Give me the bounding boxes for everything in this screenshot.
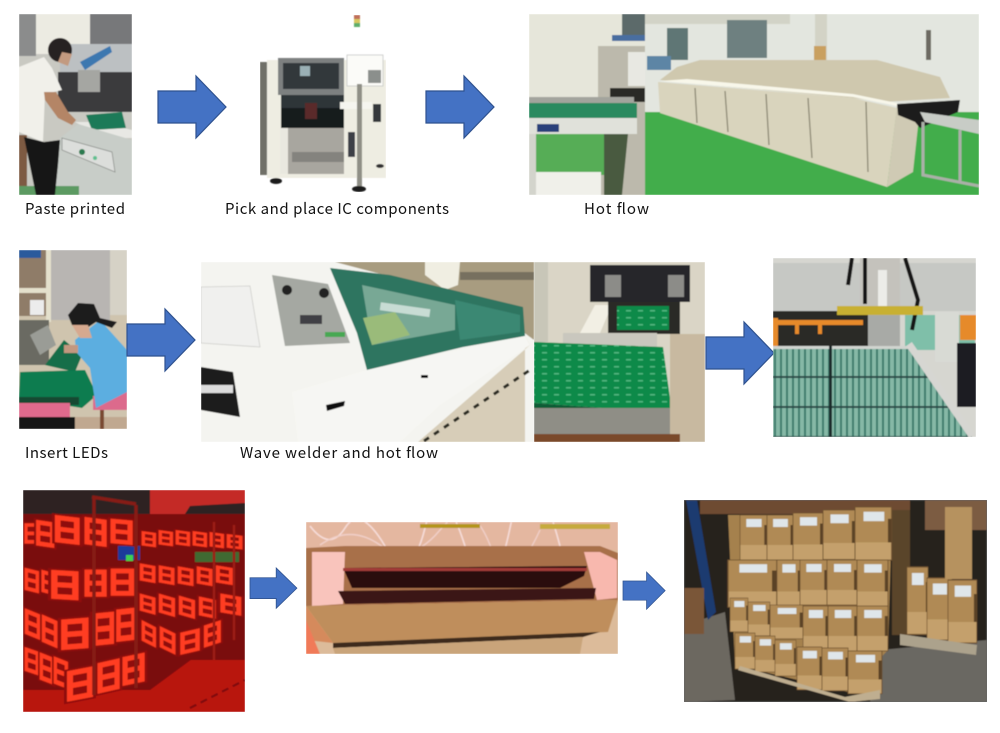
arrow 6 (623, 572, 665, 609)
arrow 5 (250, 568, 297, 608)
photo: red LED displays burn-in (23, 490, 245, 712)
photo: inserting LEDs (19, 250, 127, 429)
label: Hot flow: Hot flow (584, 198, 649, 219)
photo: wave welder (201, 262, 534, 442)
label: Paste printed: Paste printed (25, 198, 125, 219)
arrow 4 (706, 322, 774, 384)
photo: reflow oven (529, 14, 979, 195)
label: Wave welder and hot flow: Wave welder and hot flow (240, 442, 438, 463)
photo: LED panels in carton (306, 522, 618, 654)
arrow 3 (127, 309, 195, 371)
arrow 1 (158, 76, 226, 138)
photo: pick and place machine (260, 15, 386, 192)
photo: paste printing operator (19, 14, 132, 195)
photo: PCB boards at conveyor (534, 262, 705, 442)
arrow 2 (426, 76, 494, 138)
label: Pick and place IC components: Pick and place IC components (225, 198, 449, 219)
label: Insert LEDs: Insert LEDs (25, 442, 108, 463)
photo: cartons stacked on pallet (684, 500, 987, 702)
photo: LED board depanelling (773, 258, 976, 437)
